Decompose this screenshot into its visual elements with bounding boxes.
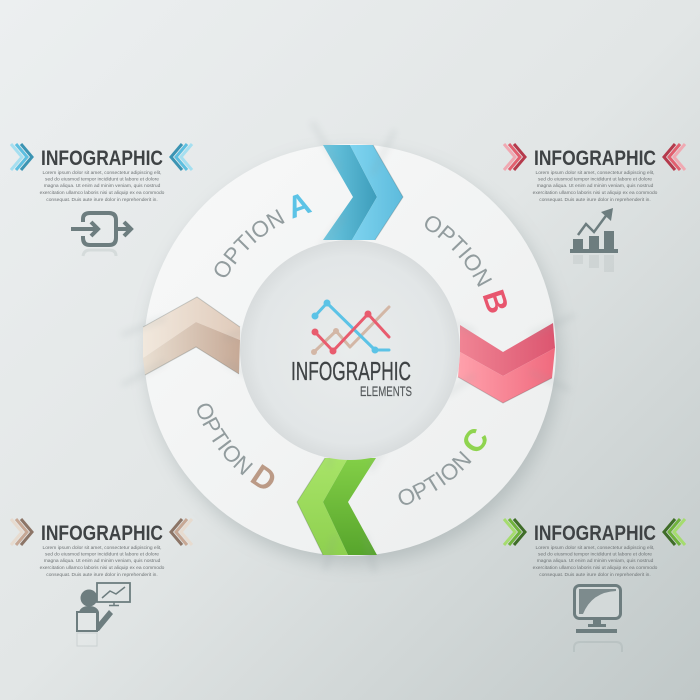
chevron: option C green bbox=[297, 458, 377, 555]
panel: bottom right info bbox=[504, 519, 685, 652]
body text: sed do eiusmod tempor incididunt ut labore et dolore bbox=[45, 176, 159, 182]
panel: central hub bbox=[240, 240, 460, 460]
body text: exercitation ullamco laboris nisi ut aliquip ex ea commodo bbox=[40, 190, 165, 196]
icon: monitor bbox=[574, 586, 622, 652]
body text: magna aliqua. Ut enim ad minim veniam, quis nostrud bbox=[44, 558, 161, 564]
body text: consequat. Duis aute irure dolor in reprehenderit in. bbox=[46, 572, 158, 578]
label: option D: OPTION D bbox=[197, 404, 274, 489]
body text: Lorem ipsum dolor sit amet, consectetur adipiscing elit, bbox=[42, 170, 162, 176]
center subtitle: ELEMENTS bbox=[360, 383, 412, 399]
body text: sed do eiusmod tempor incididunt ut labore et dolore bbox=[538, 176, 652, 182]
body text: exercitation ullamco laboris nisi ut aliquip ex ea commodo bbox=[533, 190, 658, 196]
body text: exercitation ullamco laboris nisi ut aliquip ex ea commodo bbox=[40, 565, 165, 571]
panel: bottom left info bbox=[11, 519, 192, 646]
body text: Lorem ipsum dolor sit amet, consectetur adipiscing elit, bbox=[42, 545, 162, 551]
label: option C: OPTION C bbox=[398, 429, 487, 505]
chevrons: blue right bbox=[171, 144, 192, 170]
body text: magna aliqua. Ut enim ad minim veniam, quis nostrud bbox=[44, 183, 161, 189]
icon: presenter bbox=[76, 583, 130, 646]
chevrons: tan left bbox=[11, 519, 32, 545]
heading: INFOGRAPHIC bbox=[534, 522, 656, 545]
heading: INFOGRAPHIC bbox=[41, 147, 163, 170]
chevron: option B pink bbox=[458, 323, 555, 403]
chevrons: blue left bbox=[11, 144, 32, 170]
label: option A: OPTION A bbox=[214, 194, 312, 278]
panel: central ring bbox=[122, 122, 575, 572]
body text: magna aliqua. Ut enim ad minim veniam, quis nostrud bbox=[537, 558, 654, 564]
body text: Lorem ipsum dolor sit amet, consectetur adipiscing elit, bbox=[535, 545, 655, 551]
body text: consequat. Duis aute irure dolor in reprehenderit in. bbox=[539, 572, 651, 578]
icon: growth bars bbox=[570, 208, 618, 272]
body text: sed do eiusmod tempor incididunt ut labore et dolore bbox=[538, 552, 652, 558]
body text: consequat. Duis aute irure dolor in reprehenderit in. bbox=[539, 197, 651, 203]
chevrons: green right bbox=[664, 519, 685, 545]
body text: exercitation ullamco laboris nisi ut aliquip ex ea commodo bbox=[533, 565, 658, 571]
body text: magna aliqua. Ut enim ad minim veniam, quis nostrud bbox=[537, 183, 654, 189]
chevron: option D beige bbox=[143, 297, 240, 375]
panel: top right info bbox=[504, 144, 685, 272]
panel: top left info bbox=[11, 144, 192, 256]
center title: INFOGRAPHIC bbox=[291, 356, 411, 386]
icon: process arrows bbox=[71, 213, 131, 256]
body text: consequat. Duis aute irure dolor in reprehenderit in. bbox=[46, 197, 158, 203]
label: option B: OPTION B bbox=[425, 216, 507, 313]
chevrons: tan right bbox=[171, 519, 192, 545]
body text: sed do eiusmod tempor incididunt ut labore et dolore bbox=[45, 552, 159, 558]
heading: INFOGRAPHIC bbox=[534, 147, 656, 170]
heading: INFOGRAPHIC bbox=[41, 522, 163, 545]
fold shadows bbox=[122, 122, 575, 572]
chevrons: green left bbox=[504, 519, 525, 545]
chevrons: red left bbox=[504, 144, 525, 170]
body text: Lorem ipsum dolor sit amet, consectetur adipiscing elit, bbox=[535, 170, 655, 176]
line chart: three series bbox=[311, 300, 389, 355]
chevrons: red right bbox=[664, 144, 685, 170]
chevron: option A blue bbox=[323, 145, 403, 240]
